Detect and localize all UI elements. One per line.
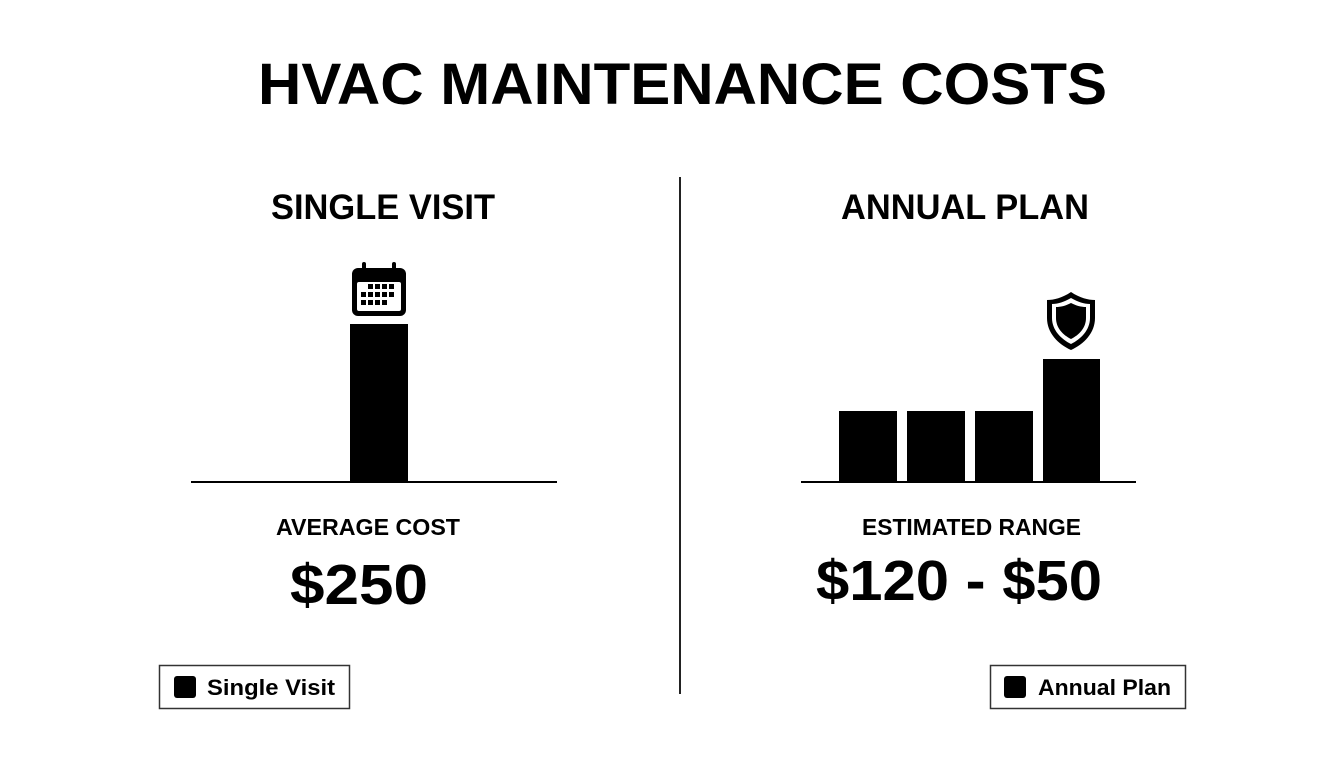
panel: single visit xyxy=(160,188,557,708)
legend: single visit xyxy=(160,666,350,708)
legend: annual plan: Annual Plan xyxy=(1038,675,1171,700)
bar chart: single visit xyxy=(191,324,557,482)
panel: annual plan xyxy=(801,188,1186,708)
label: estimated range: ESTIMATED RANGE xyxy=(862,514,1081,540)
value: $250: $250 xyxy=(290,553,428,617)
value: $120 - $50: $120 - $50 xyxy=(816,549,1102,613)
icon: shield xyxy=(1047,292,1095,350)
bar chart: annual plan xyxy=(801,359,1136,482)
label: average cost: AVERAGE COST xyxy=(276,514,460,540)
legend: single visit: Single Visit xyxy=(207,675,336,700)
heading: annual plan: ANNUAL PLAN xyxy=(841,188,1089,227)
icon: calendar xyxy=(352,262,406,316)
legend: annual plan xyxy=(990,666,1186,708)
heading: single visit: SINGLE VISIT xyxy=(271,188,495,227)
title: HVAC MAINTENANCE COSTS xyxy=(258,52,1107,117)
